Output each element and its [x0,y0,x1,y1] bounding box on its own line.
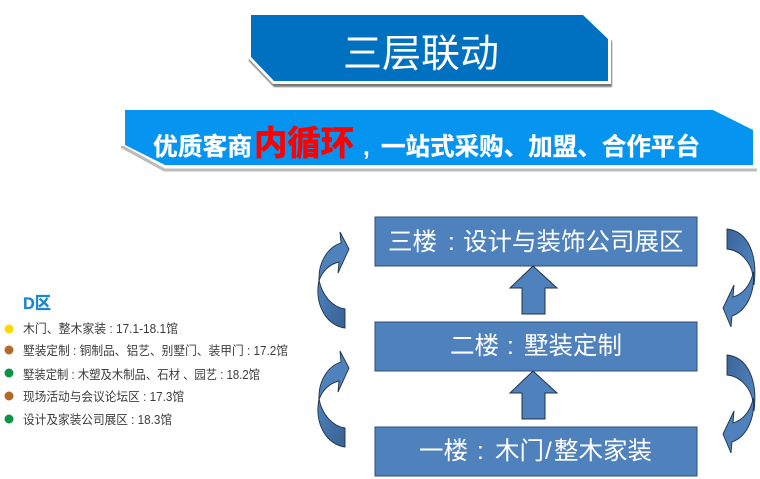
floor box: second floor: 二楼 [450,332,499,360]
arrow: up from second to third floor [510,266,557,314]
subtitle text: white remainder: 一站式采购、加盟、合作平台 [381,132,700,161]
floor box: second floor [375,322,697,371]
curved arrow: right lower [723,355,755,453]
floor box: third floor [375,217,697,266]
floor box: third floor: 设计与装饰公司展区 [463,228,684,256]
floor box: first floor: / [545,438,552,465]
legend item 5: 设计及家装公司展区 : 18.3馆 [23,412,172,427]
legend item 3: 墅装定制 : 木塑及木制品、石材 、园艺 : 18.2馆 [23,367,260,382]
subtitle text: white lead: 优质客商 [153,132,252,161]
legend item 4: 现场活动与会议论坛区 : 17.3馆 [23,389,184,404]
subtitle banner [121,110,757,172]
floor box: third floor: 三楼 [388,228,437,256]
floor box: first floor: 木门 [495,437,544,465]
curved arrow: left upper [318,232,349,328]
title text: 三层联动 [343,33,499,76]
legend: D zone [4,294,288,427]
arrow: up from first to second floor [510,371,557,419]
floor box: second floor: 墅装定制 [524,332,622,360]
curved arrow: left lower [318,351,349,447]
curved arrow: right upper [723,229,755,327]
legend item 2: 墅装定制 : 铜制品、铝艺、别墅门、装甲门 : 17.2馆 [23,343,288,358]
floor box: third floor: : [448,229,455,256]
floor box: first floor: 一楼 [419,437,468,465]
legend item 1: 木门、整木家装 : 17.1-18.1馆 [23,321,178,336]
floor box: first floor: : [477,438,484,465]
floor box: first floor [375,427,697,476]
subtitle text: comma: , [363,134,370,161]
floor box: first floor: 整木家装 [554,437,652,465]
title banner [248,13,612,87]
subtitle text: red highlight: 内循环 [254,125,354,163]
floor box: second floor: : [507,333,514,360]
legend heading: D区 [23,294,51,313]
